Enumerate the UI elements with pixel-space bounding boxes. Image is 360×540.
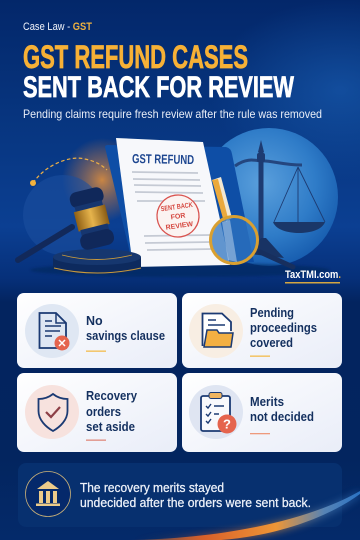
folder inner tab — [212, 179, 228, 222]
stamp — [154, 192, 202, 240]
dashed arc — [33, 158, 107, 183]
top-right light — [210, 0, 360, 180]
scales of justice — [235, 140, 325, 258]
document lines — [132, 172, 214, 250]
footer text line 2: undecided after the orders were sent back. — [80, 496, 311, 510]
arc dot — [30, 180, 36, 186]
accent — [86, 350, 106, 352]
card text: Pending — [250, 306, 294, 320]
card: pending proceedings covered — [182, 293, 342, 368]
logo: TaxTMI.com. — [285, 269, 341, 281]
magnifying glass — [210, 216, 293, 267]
hero illustration — [18, 128, 341, 284]
gavel — [18, 186, 141, 274]
stamp: FOR — [170, 212, 186, 221]
stamp: SENT BACK — [160, 202, 193, 213]
icon: document with cross — [25, 304, 79, 358]
icon: folder with document — [189, 304, 243, 358]
header text block — [23, 21, 322, 121]
card text line 2: proceedings — [250, 321, 317, 335]
folder inner sheet — [212, 177, 232, 222]
accent — [250, 433, 270, 434]
subtitle: Pending claims require fresh review after the rule was removed — [23, 107, 322, 121]
stamp: REVIEW — [165, 221, 194, 232]
card text line 3: set aside — [86, 420, 135, 434]
swoosh — [120, 491, 360, 540]
accent — [250, 356, 270, 357]
faint circle — [23, 175, 103, 255]
orange glow — [62, 138, 142, 222]
table shadow — [30, 263, 330, 277]
card: recovery orders set aside — [17, 373, 177, 452]
footer text: The recovery merits stayed — [80, 481, 224, 495]
document heading: GST REFUND — [132, 151, 194, 167]
card text line 2: not decided — [250, 410, 314, 424]
document — [116, 138, 230, 267]
card text: No — [86, 314, 103, 328]
icon: checklist with question mark — [189, 385, 243, 439]
accent — [86, 440, 106, 441]
card text line 2: savings clause — [86, 329, 165, 343]
card text line 2: orders — [86, 405, 121, 419]
icon: courthouse — [26, 472, 70, 516]
icon: checklist with question mark: ? — [223, 416, 231, 432]
blue circle backdrop — [200, 128, 338, 266]
card text: Merits — [250, 395, 284, 409]
gavel sound block — [53, 260, 141, 274]
icon: shield with check — [25, 385, 79, 439]
folder — [105, 145, 254, 266]
gavel handle — [18, 227, 72, 260]
card: no savings clause — [17, 293, 177, 368]
eyebrow: Case Law - GST — [23, 21, 92, 33]
card text: Recovery — [86, 389, 137, 403]
card text line 3: covered — [250, 336, 293, 350]
title line 1: GST REFUND CASES — [23, 39, 248, 75]
card: merits not decided — [182, 373, 342, 452]
footer callout — [18, 463, 342, 527]
gavel head — [68, 186, 116, 251]
